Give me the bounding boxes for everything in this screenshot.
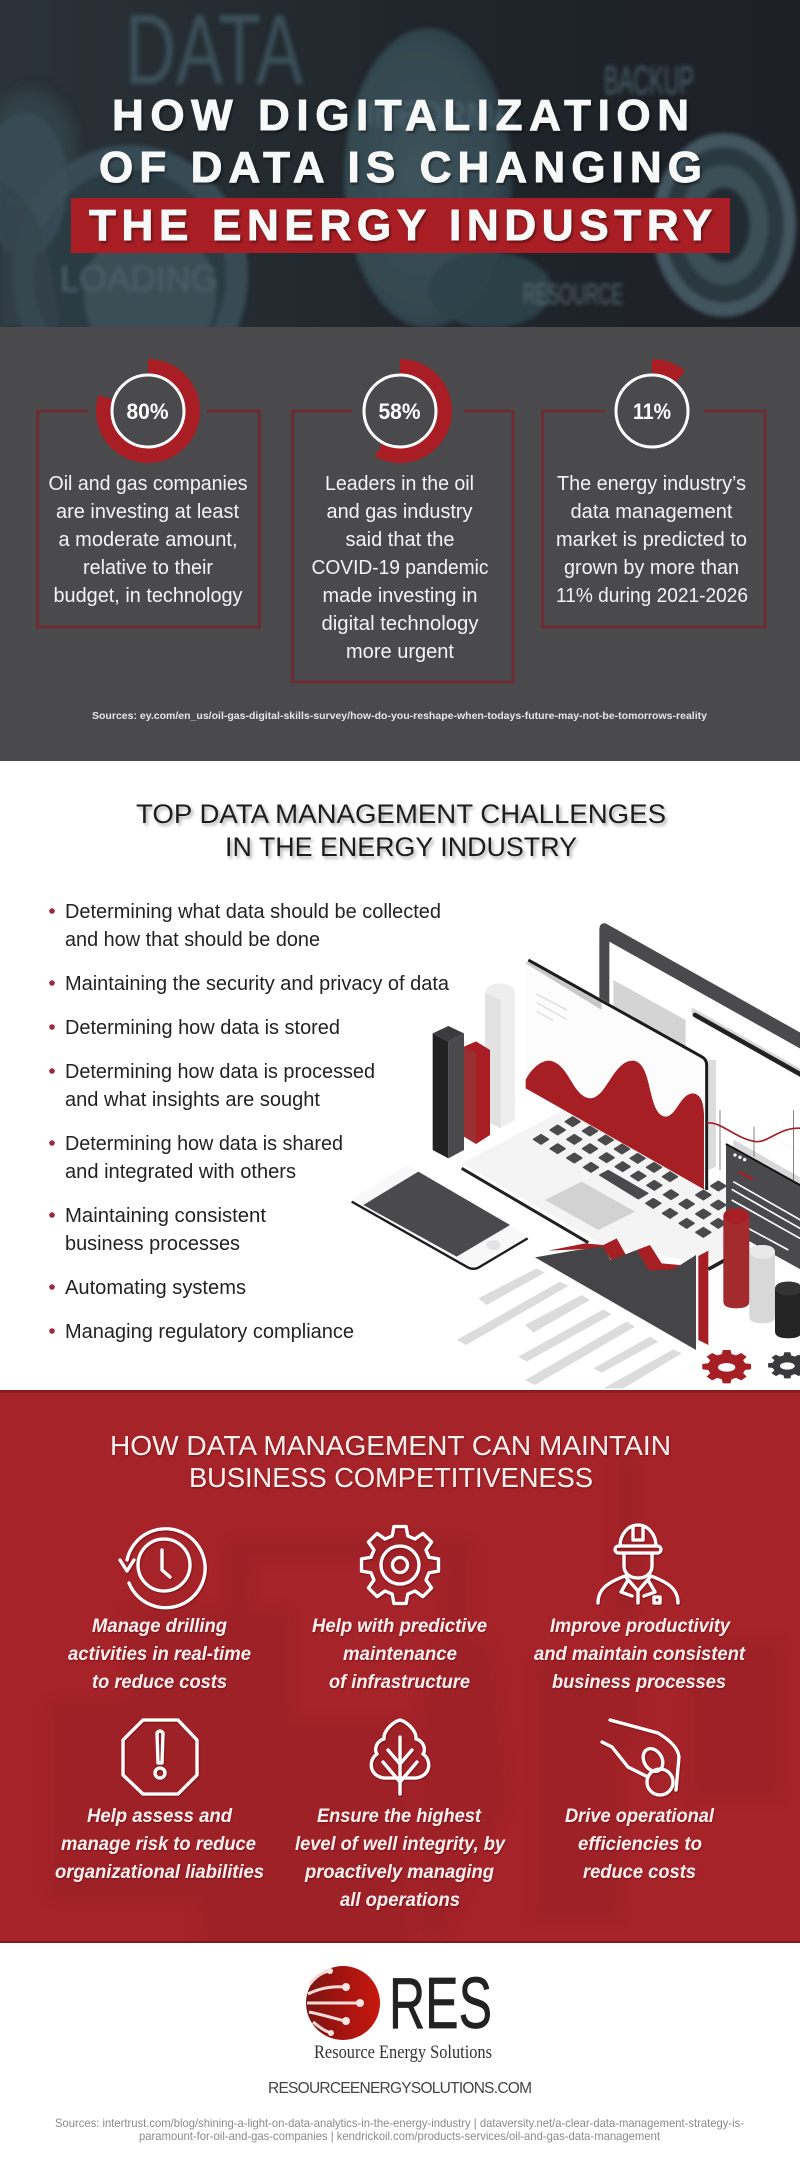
stat text bbox=[556, 473, 748, 607]
browser window and line chart bbox=[707, 1110, 800, 1270]
stat text: market is predicted to bbox=[556, 529, 747, 551]
stat text: Oil and gas companies bbox=[48, 473, 248, 495]
icon: gear bbox=[362, 1526, 438, 1604]
stat text: The energy industry’s bbox=[557, 473, 746, 495]
benefit text: level of well integrity, by bbox=[295, 1834, 506, 1855]
bullet list of challenges: Automating systems bbox=[65, 1277, 246, 1299]
benefit: risk bbox=[55, 1720, 264, 1883]
section heading: TOP DATA MANAGEMENT CHALLENGES bbox=[136, 799, 666, 829]
laptop screen with red area chart bbox=[525, 958, 716, 1190]
benefit text: all operations bbox=[340, 1890, 460, 1911]
stat text: COVID-19 pandemic bbox=[312, 557, 488, 579]
bullet list of challenges: Managing regulatory compliance bbox=[65, 1321, 354, 1343]
smartphone bbox=[352, 1165, 528, 1269]
back monitor bbox=[599, 923, 800, 1153]
section heading bbox=[110, 1430, 671, 1493]
benefit text: and maintain consistent bbox=[534, 1644, 746, 1665]
stat text: a moderate amount, bbox=[58, 529, 238, 551]
benefit text: to reduce costs bbox=[92, 1672, 227, 1693]
bullet list of challenges: Determining how data is shared bbox=[65, 1133, 343, 1155]
stat text bbox=[48, 473, 248, 607]
bullet list of challenges: business processes bbox=[65, 1233, 240, 1255]
stat text: more urgent bbox=[346, 641, 454, 663]
benefit: drilling bbox=[68, 1529, 251, 1693]
logo: Resource Energy Solutions bbox=[306, 1963, 492, 2063]
bullet list of challenges: Determining how data is stored bbox=[65, 1017, 340, 1039]
section heading: IN THE ENERGY INDUSTRY bbox=[225, 832, 577, 862]
stat card: 58% bbox=[292, 366, 513, 682]
section heading: HOW DATA MANAGEMENT CAN MAINTAIN bbox=[110, 1430, 671, 1461]
printed report lines bbox=[457, 1268, 682, 1388]
benefit text bbox=[565, 1806, 715, 1883]
benefit text: manage risk to reduce bbox=[61, 1834, 256, 1855]
footer sources bbox=[55, 2116, 744, 2143]
website: RESOURCEENERGYSOLUTIONS.COM bbox=[268, 2080, 532, 2097]
benefit text bbox=[68, 1616, 251, 1693]
gear dark bbox=[768, 1352, 800, 1378]
panel: footer bbox=[0, 1943, 800, 2163]
title bbox=[71, 91, 730, 253]
stat text: grown by more than bbox=[564, 557, 739, 579]
benefit text: activities in real-time bbox=[68, 1644, 251, 1665]
gear red bbox=[702, 1350, 751, 1383]
benefit text: Improve productivity bbox=[550, 1616, 731, 1637]
footer sources: paramount-for-oil-and-gas-companies | kendrickoil.com/products-services/oil-and-gas-data-management bbox=[139, 2129, 661, 2143]
benefit text: of infrastructure bbox=[329, 1672, 470, 1693]
bullet list of challenges: Maintaining consistent bbox=[65, 1205, 266, 1227]
benefit text: proactively managing bbox=[304, 1862, 494, 1883]
logo wordmark: RES bbox=[389, 1963, 492, 2044]
stat text: relative to their bbox=[83, 557, 213, 579]
panel: business competitiveness bbox=[0, 1390, 800, 1944]
title lines bbox=[89, 91, 712, 250]
panel: challenges bbox=[0, 761, 800, 1390]
bullet list of challenges bbox=[49, 901, 450, 1343]
stat card: 11% bbox=[542, 366, 765, 627]
benefit text: reduce costs bbox=[583, 1862, 696, 1883]
benefit: operational efficiencies bbox=[565, 1720, 715, 1883]
section heading: BUSINESS COMPETITIVENESS bbox=[189, 1462, 593, 1493]
background word: LOADING: LOADING bbox=[60, 258, 218, 299]
donut chart 11% bbox=[608, 366, 696, 456]
panel: key statistics bbox=[0, 327, 800, 761]
benefit text: business processes bbox=[552, 1672, 726, 1693]
stat text: made investing in bbox=[322, 585, 478, 607]
bullet list of challenges: Determining what data should be collected bbox=[65, 901, 441, 923]
donut chart 80% bbox=[104, 366, 192, 456]
benefit text: Manage drilling bbox=[92, 1616, 227, 1637]
stat text: Leaders in the oil bbox=[325, 473, 474, 495]
cylinder bars bbox=[723, 1208, 800, 1338]
title highlight bar bbox=[71, 198, 730, 253]
stat text: budget, in technology bbox=[54, 585, 242, 607]
background word: BACKUP: BACKUP bbox=[604, 59, 694, 103]
logo globe mark bbox=[306, 1966, 380, 2040]
benefit text: efficiencies to bbox=[578, 1834, 702, 1855]
stat text: are investing at least bbox=[56, 501, 239, 523]
stat card: 80% bbox=[38, 366, 260, 627]
donut chart 58% bbox=[356, 366, 444, 456]
stat text: data management bbox=[570, 501, 733, 523]
benefit text bbox=[295, 1806, 506, 1911]
benefit: productivity bbox=[534, 1525, 746, 1693]
icon: leaf bbox=[371, 1720, 429, 1794]
decorative data imagery background bbox=[0, 0, 796, 405]
title lines: OF DATA IS CHANGING bbox=[99, 143, 702, 192]
benefit text: Help assess and bbox=[87, 1806, 232, 1827]
stats sources: Sources: ey.com/en_us/oil-gas-digital-skills-survey/how-do-you-reshape-when-todays-future-may-not-be-tomorrows-reality bbox=[92, 710, 707, 722]
benefit text: organizational liabilities bbox=[55, 1862, 264, 1883]
bar columns bbox=[433, 983, 515, 1158]
section heading bbox=[136, 799, 666, 862]
stat text: said that the bbox=[346, 529, 454, 551]
stat text: digital technology bbox=[322, 613, 478, 635]
icon: hand holding coin bbox=[602, 1720, 679, 1795]
faint background silhouettes bbox=[50, 1455, 780, 1943]
benefit text bbox=[534, 1616, 746, 1693]
donut chart 80%: 80% bbox=[126, 399, 168, 424]
icon: clock with arrow bbox=[120, 1529, 205, 1608]
stat text: and gas industry bbox=[326, 501, 472, 523]
background word: INFORMATION: INFORMA bbox=[365, 96, 515, 134]
bullet list of challenges: and integrated with others bbox=[65, 1161, 296, 1183]
title lines: HOW DIGITALIZATION bbox=[112, 91, 689, 140]
benefit text: Drive operational bbox=[565, 1806, 715, 1827]
stat text bbox=[312, 473, 488, 663]
bullet list of challenges: Maintaining the security and privacy of data bbox=[65, 973, 450, 995]
benefit text bbox=[312, 1616, 487, 1693]
icon: warning octagon bbox=[123, 1720, 197, 1794]
stat text: 11% during 2021-2026 bbox=[556, 585, 748, 607]
footer sources: Sources: intertrust.com/blog/shining-a-light-on-data-analytics-in-the-energy-industry | dataversity.net/a-clear-data-management-strategy-is- bbox=[55, 2116, 744, 2130]
donut chart 11%: 11% bbox=[633, 399, 671, 424]
benefit text: Ensure the highest bbox=[317, 1806, 482, 1827]
donut chart 58%: 58% bbox=[378, 399, 420, 424]
benefit: predictive maintenance bbox=[312, 1526, 487, 1693]
icon: worker with hard hat bbox=[598, 1525, 678, 1603]
background word: RESOURCE: RESOURCE bbox=[523, 279, 623, 311]
benefit: well integrity bbox=[295, 1720, 506, 1911]
bullet list of challenges: Determining how data is processed bbox=[65, 1061, 375, 1083]
logo tagline: Resource Energy Solutions bbox=[314, 2042, 492, 2063]
benefit text: Help with predictive bbox=[312, 1616, 487, 1637]
bullet list of challenges: and what insights are sought bbox=[65, 1089, 320, 1111]
dark area chart bbox=[535, 1238, 708, 1350]
benefit text bbox=[55, 1806, 264, 1883]
benefit text: maintenance bbox=[343, 1644, 457, 1665]
title lines: THE ENERGY INDUSTRY bbox=[89, 201, 712, 250]
bullet list of challenges: and how that should be done bbox=[65, 929, 320, 951]
laptop base and keyboard bbox=[462, 1107, 733, 1263]
illustration: isometric laptop and data charts bbox=[352, 923, 800, 1388]
header banner bbox=[0, 0, 800, 405]
